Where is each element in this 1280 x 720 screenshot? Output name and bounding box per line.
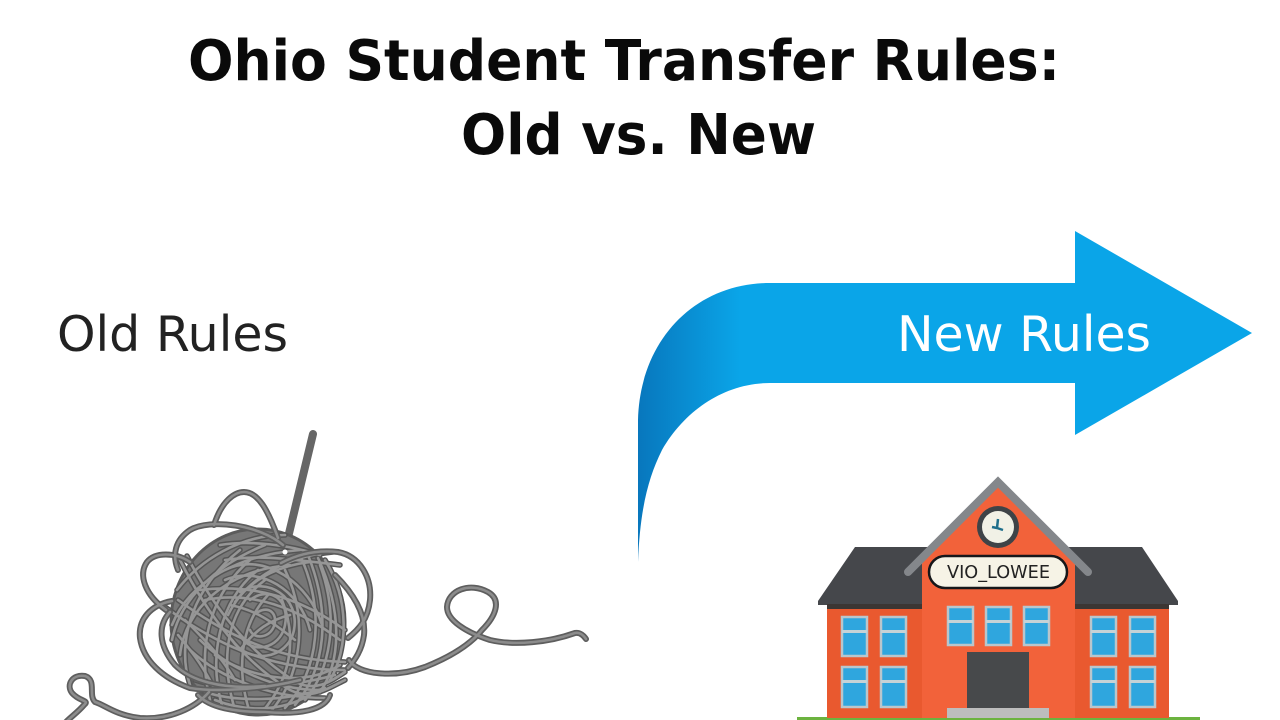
yarn strands, highlights <box>165 535 345 713</box>
roof shadow <box>827 604 1169 609</box>
central block <box>922 485 1075 718</box>
needle <box>285 434 313 550</box>
side wings <box>827 605 1169 718</box>
sign <box>929 556 1067 588</box>
title <box>188 29 1060 168</box>
outer loops and tails <box>66 492 586 720</box>
heading: old rules: Old Rules <box>57 306 288 363</box>
icon: tangled yarn ball <box>66 434 586 720</box>
needle eye <box>282 550 288 554</box>
roof left <box>818 547 940 605</box>
highlights on outer loops <box>66 492 586 720</box>
window crossbars <box>842 620 1155 683</box>
title: Old vs. New <box>461 103 816 168</box>
roof right <box>1056 547 1178 605</box>
ball base <box>171 529 345 715</box>
sign: VIO_LOWEE <box>947 562 1050 583</box>
door <box>967 652 1029 708</box>
icon: school building <box>797 482 1200 720</box>
label: new rules: New Rules <box>897 306 1151 363</box>
ground <box>797 717 1200 720</box>
steps <box>947 708 1049 718</box>
gable trim <box>908 482 1088 572</box>
arrow: new rules <box>638 231 1252 562</box>
windows: centre row <box>842 607 1155 707</box>
title: Ohio Student Transfer Rules: <box>188 29 1060 94</box>
clock <box>977 506 1019 548</box>
yarn strands, outlines <box>165 535 345 713</box>
